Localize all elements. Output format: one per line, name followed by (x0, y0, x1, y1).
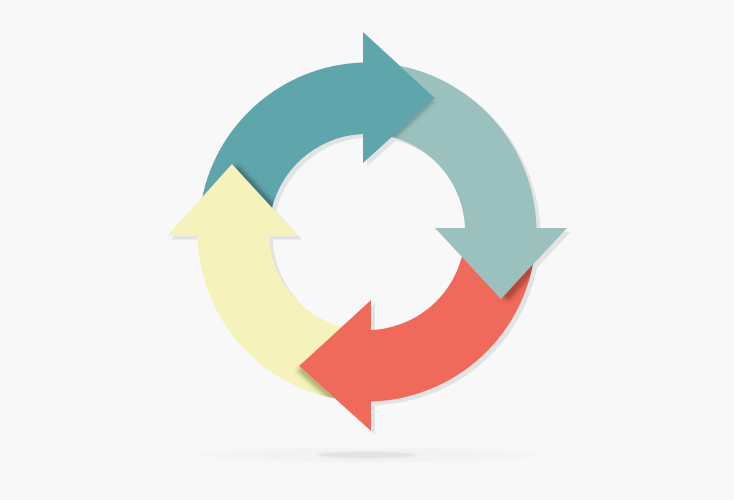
arrow: coral red (bottom right to bottom left) (299, 257, 535, 431)
arrow: teal (top left to top right) (202, 32, 435, 208)
arrow: pale yellow (bottom left to left) (167, 164, 342, 404)
arrow: sage green (top right to bottom right) (390, 66, 567, 299)
ground shadow (184, 446, 556, 464)
offset drop shadows (171, 36, 571, 434)
cycle diagram (167, 32, 571, 459)
